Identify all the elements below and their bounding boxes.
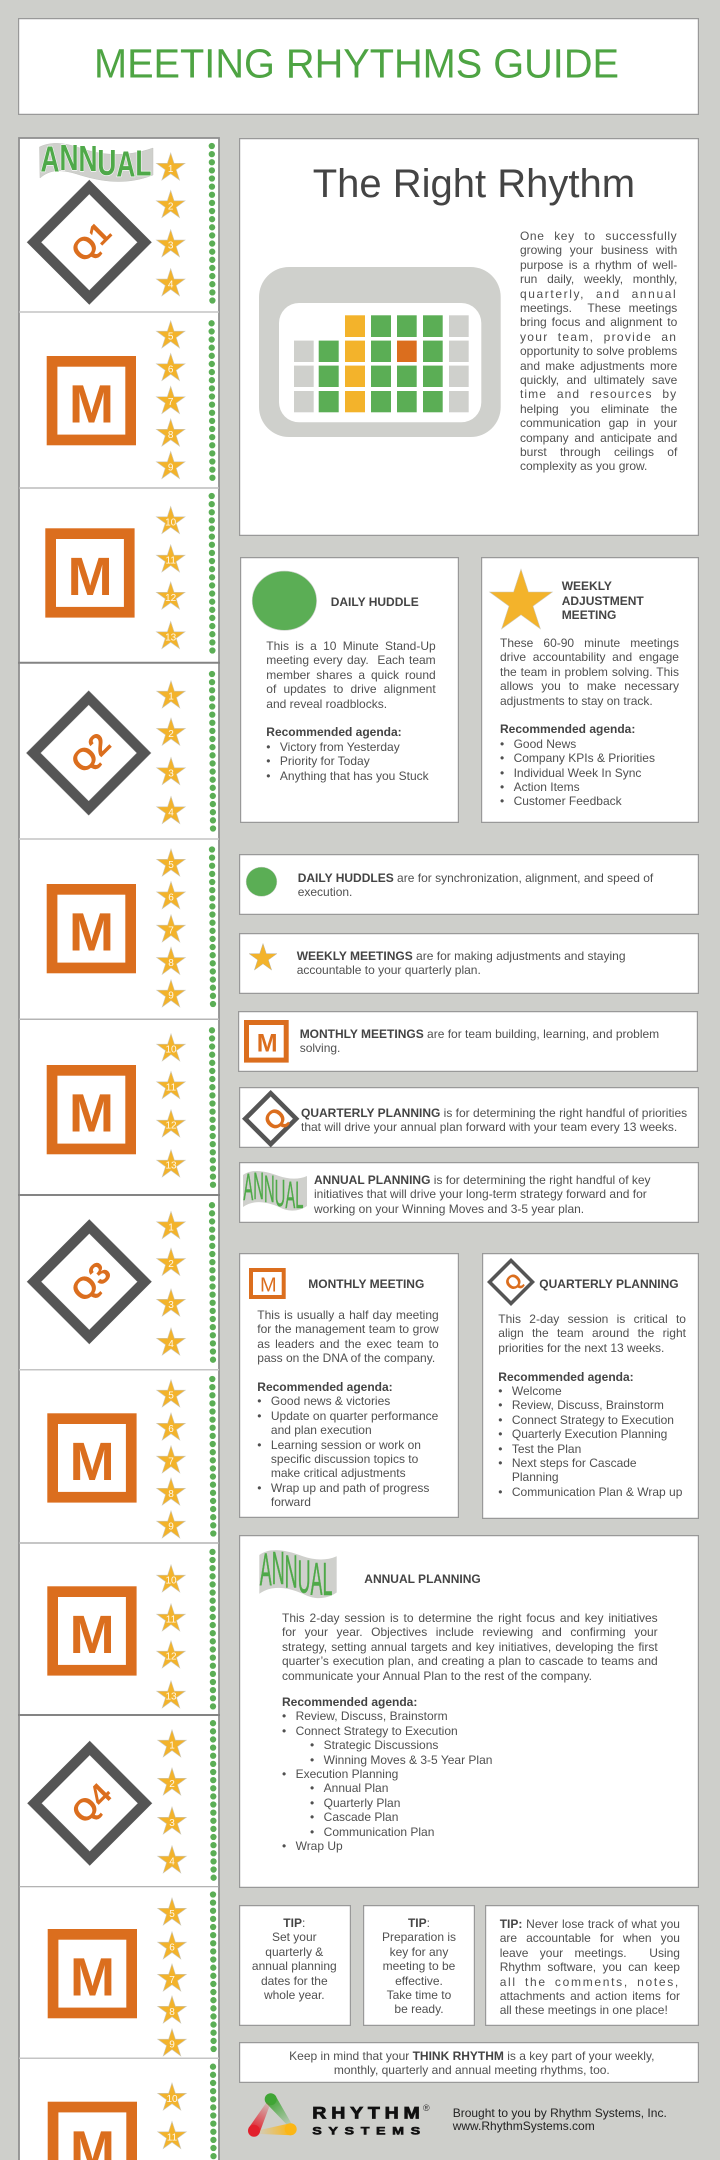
heading: The Right Rhythm xyxy=(313,162,635,206)
intro text: and make adjustments more xyxy=(520,359,677,373)
month block: weeks 10-13: 11 xyxy=(166,556,176,567)
tip text: Take time to xyxy=(387,1988,451,2002)
tip text: attachments and action items for xyxy=(500,1989,680,2003)
tip: rhythm software xyxy=(485,1905,699,2026)
footer logo: rhythm systems: ® xyxy=(423,2103,430,2113)
tip text: Rhythm software, you can keep xyxy=(500,1960,680,1974)
month block: weeks 10-13 xyxy=(51,506,185,649)
icon: monthly square xyxy=(249,1268,286,1299)
icon: calendar grid xyxy=(259,267,501,437)
tip: preparation xyxy=(363,1905,475,2026)
body text: This 2-day session is to determine the right focus and key initiatives xyxy=(282,1611,658,1625)
quarter 2 block: 1 xyxy=(168,692,174,703)
month block: weeks 5-9: 8 xyxy=(168,1489,174,1500)
legend text: WEEKLY MEETINGS are for making adjustments and staying xyxy=(297,949,626,963)
tip text: whole year. xyxy=(264,1988,325,2002)
icon: monthly square xyxy=(244,1020,289,1063)
body text and agenda: for the management team to grow xyxy=(257,1322,439,1336)
tip text xyxy=(252,1916,337,2002)
intro text: opportunity to solve problems xyxy=(520,344,677,358)
heading: MEETING xyxy=(562,608,616,622)
intro text: One key to successfully xyxy=(520,229,677,243)
body text and agenda: Recommended agenda: xyxy=(500,722,635,736)
intro text: time and resources by xyxy=(520,387,677,401)
body text and agenda: Review, Discuss, Brainstorm xyxy=(512,1398,664,1412)
panel: weekly adjustment meeting xyxy=(481,557,699,823)
month block: weeks 5-9: 6 xyxy=(169,1943,175,1954)
icon: annual banner: ANNUAL xyxy=(40,137,151,184)
tip text: all the comments, notes, xyxy=(500,1975,680,1989)
month block: weeks 5-9: 9 xyxy=(168,1522,174,1533)
body text and agenda: Company KPIs & Priorities xyxy=(514,751,655,765)
quarter 2 block: 3 xyxy=(168,768,174,779)
month block: weeks 10-13: 10 xyxy=(165,1045,177,1056)
heading xyxy=(562,579,644,622)
footer credit: www.RhythmSystems.com xyxy=(453,2119,595,2133)
tip text: dates for the xyxy=(261,1974,328,1988)
month block: weeks 5-9: M xyxy=(69,903,114,963)
month block: weeks 5-9: 8 xyxy=(169,2007,175,2018)
month block: weeks 5-9: 8 xyxy=(168,958,174,969)
tip text: Preparation is xyxy=(382,1930,456,1944)
body text and agenda: Learning session or work on xyxy=(271,1438,421,1452)
quarter 1 block xyxy=(27,153,185,305)
body text and agenda: Customer Feedback xyxy=(514,794,622,808)
month block: weeks 5-9: M xyxy=(69,375,114,435)
intro text: run daily, weekly, monthly, xyxy=(520,272,677,286)
intro text: your team, provide an xyxy=(520,330,677,344)
month block: weeks 5-9: 6 xyxy=(168,1424,174,1435)
body text and agenda: adjustments to stay on track. xyxy=(500,694,653,708)
month block: weeks 5-9: 5 xyxy=(168,1391,174,1402)
body text and agenda: and plan execution xyxy=(271,1423,372,1437)
quarter 3 block: 1 xyxy=(168,1222,174,1233)
month block: weeks 5-9: 5 xyxy=(169,1909,175,1920)
month block: weeks 5-9: M xyxy=(70,1948,115,2008)
intro text: purpose is a rhythm of well- xyxy=(520,258,677,272)
agenda list: Quarterly Plan xyxy=(324,1796,400,1810)
body text and agenda: Next steps for Cascade xyxy=(512,1456,637,1470)
quarter 3 block: 3 xyxy=(168,1300,174,1311)
footer logo: rhythm systems xyxy=(248,2093,430,2137)
intro text: growing your business with xyxy=(520,243,677,257)
icon: green circle xyxy=(246,866,278,896)
month block: weeks 5-9: 9 xyxy=(168,462,174,473)
body text: quarter’s execution plan, and creating a plan to cascade to teams and xyxy=(282,1654,658,1668)
legend text: QUARTERLY PLANNING is for determining the right handful of priorities xyxy=(301,1106,687,1120)
footer logo: rhythm systems: SYSTEMS xyxy=(312,2124,420,2137)
body text and agenda: pass on the DNA of the company. xyxy=(257,1351,435,1365)
month block: weeks 10-13: M xyxy=(68,547,113,607)
month block: weeks 10-11 xyxy=(53,2083,186,2160)
icon: gold star xyxy=(249,944,277,970)
body text and agenda: Action Items xyxy=(514,780,580,794)
footer logo: rhythm systems: RHYTHM xyxy=(312,2103,420,2122)
body text and agenda: Quarterly Execution Planning xyxy=(512,1427,667,1441)
legend: daily huddles xyxy=(239,854,699,915)
legend: annual planning xyxy=(239,1162,699,1223)
body text and agenda: drive accountability and engage xyxy=(500,650,679,664)
tip text xyxy=(500,1917,680,2017)
month block: weeks 5-9: M xyxy=(70,1432,115,1492)
quarter 3 block: 2 xyxy=(168,1259,174,1270)
body text and agenda: Recommended agenda: xyxy=(257,1380,393,1394)
tip text: are accountable for when you xyxy=(500,1931,680,1945)
heading: DAILY HUDDLE xyxy=(331,595,419,609)
heading: ANNUAL PLANNING xyxy=(364,1572,481,1586)
quarter 3 block: Q3 xyxy=(64,1255,118,1309)
icon: quarterly diamond: Q xyxy=(257,1101,293,1136)
month block: weeks 10-13: 12 xyxy=(165,1652,177,1663)
icon: annual banner: ANNUAL xyxy=(260,1543,332,1605)
agenda list xyxy=(282,1695,492,1853)
legend text xyxy=(301,1106,687,1134)
footer credit xyxy=(452,2106,667,2133)
intro text: quarterly, and annual xyxy=(520,287,677,301)
title banner: MEETING RHYTHMS GUIDE xyxy=(94,40,619,86)
body text and agenda: This is a 10 Minute Stand-Up xyxy=(266,639,436,653)
agenda list: Recommended agenda: xyxy=(282,1695,417,1709)
month block: weeks 10-13: 10 xyxy=(165,517,177,528)
quarter 1 block: 4 xyxy=(168,280,174,290)
quarter 4 block xyxy=(27,1730,186,1873)
legend text: execution. xyxy=(298,885,352,899)
body text and agenda: These 60-90 minute meetings xyxy=(500,636,679,650)
panel: annual planning xyxy=(239,1535,699,1888)
month block: weeks 5-9: 8 xyxy=(168,430,174,441)
quarter 2 block: 2 xyxy=(168,729,174,740)
body text and agenda: Good news & victories xyxy=(271,1394,390,1408)
body text and agenda: Victory from Yesterday xyxy=(280,740,400,754)
intro text: communication gap in your xyxy=(520,416,677,430)
quarter 2 block: 4 xyxy=(168,807,174,818)
tip text: Set your xyxy=(272,1930,317,1944)
body text and agenda: Planning xyxy=(512,1470,559,1484)
quarter 2 block: Q2 xyxy=(64,726,118,780)
icon: quarterly diamond xyxy=(487,1258,535,1306)
agenda list: Winning Moves & 3-5 Year Plan xyxy=(324,1752,492,1766)
month block: weeks 10-13: 11 xyxy=(166,1082,177,1093)
body text xyxy=(282,1611,658,1682)
body text and agenda: Anything that has you Stuck xyxy=(280,769,429,783)
icon: quarterly diamond xyxy=(242,1090,300,1148)
month block: weeks 5-9: 7 xyxy=(168,397,174,408)
body text and agenda: Recommended agenda: xyxy=(498,1370,634,1384)
panel: daily huddle xyxy=(240,557,459,823)
callout text xyxy=(289,2049,654,2077)
legend text: MONTHLY MEETINGS are for team building, learning, and problem xyxy=(300,1027,659,1041)
heading: QUARTERLY PLANNING xyxy=(539,1277,679,1291)
legend text: working on your Winning Moves and 3-5 year plan. xyxy=(314,1202,584,1216)
icon: monthly square: M xyxy=(260,1275,277,1297)
intro text: company and anticipate and xyxy=(520,431,677,445)
intro text: burst through ceilings of xyxy=(520,445,677,459)
icon: monthly square: M xyxy=(257,1029,278,1057)
title banner xyxy=(18,18,699,115)
tip text: leave your meetings. Using xyxy=(500,1946,680,1960)
panel: the right rhythm xyxy=(239,138,699,536)
tip text: TIP: Never lose track of what you xyxy=(500,1917,680,1931)
body text and agenda xyxy=(266,639,436,783)
tip text: be ready. xyxy=(394,2002,444,2016)
body text and agenda: Recommended agenda: xyxy=(266,725,402,739)
month block: weeks 5-9: 7 xyxy=(168,926,174,937)
legend text: accountable to your quarterly plan. xyxy=(297,963,481,977)
legend text: initiatives that will drive your long-term strategy forward and for xyxy=(314,1187,647,1201)
intro text: complexity as you grow. xyxy=(520,459,647,473)
body text and agenda: Priority for Today xyxy=(280,754,370,768)
legend text: DAILY HUDDLES are for synchronization, alignment, and speed of xyxy=(298,871,653,885)
agenda list: Annual Plan xyxy=(324,1781,388,1795)
body text and agenda: Wrap up and path of progress xyxy=(271,1481,429,1495)
heading: WEEKLY xyxy=(562,579,612,593)
intro text: helping you eliminate the xyxy=(520,402,677,416)
month block: weeks 5-9 xyxy=(53,1898,186,2056)
tip: planning dates xyxy=(239,1905,351,2026)
legend text xyxy=(314,1173,651,1216)
tip text: TIP: xyxy=(408,1916,430,1930)
intro text: bring focus and alignment to xyxy=(520,315,677,329)
tip text: annual planning xyxy=(252,1959,337,1973)
agenda list: Strategic Discussions xyxy=(324,1738,438,1752)
agenda list: Cascade Plan xyxy=(324,1810,398,1824)
quarter 4 block: Q4 xyxy=(65,1776,119,1830)
legend text: solving. xyxy=(300,1041,340,1055)
legend text: that will drive your annual plan forward with your team every 13 weeks. xyxy=(301,1120,677,1134)
month block: weeks 10-13: M xyxy=(70,1605,115,1665)
body text and agenda: This 2-day session is critical to xyxy=(498,1312,686,1326)
panel: quarterly planning xyxy=(482,1253,699,1519)
month block: weeks 10-13: 12 xyxy=(165,593,177,604)
callout: think rhythm xyxy=(239,2042,699,2083)
body text and agenda: as leaders and the exec team to xyxy=(257,1337,439,1351)
month block: weeks 5-9 xyxy=(52,849,185,1007)
month block: weeks 10-11: 10 xyxy=(166,2094,178,2105)
daily huddle dots xyxy=(212,146,214,2160)
panel: monthly meeting xyxy=(239,1253,459,1518)
body text: communicate your Annual Plan to the rest of the company. xyxy=(282,1668,592,1682)
body text and agenda: specific discussion topics to xyxy=(271,1452,418,1466)
body text and agenda xyxy=(257,1308,439,1509)
quarter 1 block: 1 xyxy=(168,164,174,175)
month block: weeks 10-13: 13 xyxy=(165,1161,177,1172)
quarter 4 block: 2 xyxy=(169,1779,175,1790)
body text and agenda: Test the Plan xyxy=(512,1442,581,1456)
body text and agenda: Welcome xyxy=(512,1384,562,1398)
left column: yearly timeline xyxy=(18,137,220,2160)
body text and agenda: the team in problem solving. This xyxy=(500,665,679,679)
icon: green circle xyxy=(252,570,317,631)
body text and agenda: meeting every day. Each team xyxy=(266,653,436,667)
quarter 4 block: 3 xyxy=(169,1818,175,1829)
tip text: quarterly & xyxy=(265,1945,323,1959)
month block: weeks 10-13: 12 xyxy=(165,1121,177,1132)
agenda list: Communication Plan xyxy=(324,1825,434,1839)
quarter 4 block: 4 xyxy=(169,1857,175,1868)
icon: quarterly diamond: Q xyxy=(501,1269,527,1296)
body text and agenda: make critical adjustments xyxy=(271,1466,406,1480)
month block: weeks 10-11: 11 xyxy=(167,2132,178,2143)
body text and agenda xyxy=(500,636,679,808)
quarter 3 block xyxy=(27,1212,185,1355)
agenda list: Review, Discuss, Brainstorm xyxy=(296,1709,448,1723)
icon: annual banner: ANNUAL xyxy=(243,1166,303,1217)
body text and agenda: align the team around the right xyxy=(498,1326,686,1340)
quarter 4 block: 1 xyxy=(169,1741,175,1752)
legend: monthly meetings xyxy=(238,1011,698,1072)
body text and agenda: Individual Week In Sync xyxy=(514,766,641,780)
heading: ADJUSTMENT xyxy=(562,594,644,608)
month block: weeks 5-9: 6 xyxy=(168,364,174,375)
month block: weeks 5-9: 5 xyxy=(168,332,174,343)
month block: weeks 5-9: 9 xyxy=(169,2040,175,2051)
month block: weeks 5-9 xyxy=(52,321,185,479)
month block: weeks 5-9: 7 xyxy=(169,1975,175,1986)
body text and agenda: Connect Strategy to Execution xyxy=(512,1413,674,1427)
icon: gold star xyxy=(489,568,553,630)
body text and agenda: and reveal roadblocks. xyxy=(266,697,387,711)
month block: weeks 5-9 xyxy=(53,1380,185,1538)
legend text: ANNUAL PLANNING is for determining the right handful of key xyxy=(314,1173,651,1187)
legend text xyxy=(300,1027,659,1055)
month block: weeks 10-13: 10 xyxy=(165,1576,177,1587)
footer credit: Brought to you by Rhythm Systems, Inc. xyxy=(453,2106,667,2120)
quarter 2 block xyxy=(26,681,185,824)
month block: weeks 5-9: 6 xyxy=(168,892,174,903)
legend text xyxy=(296,949,626,977)
body text and agenda: Update on quarter performance xyxy=(271,1409,438,1423)
quarter 3 block: 4 xyxy=(168,1339,174,1350)
legend: quarterly planning xyxy=(239,1087,699,1148)
tip text: effective. xyxy=(395,1974,443,1988)
agenda list: Wrap Up xyxy=(296,1839,343,1853)
heading: MONTHLY MEETING xyxy=(308,1277,424,1291)
body text and agenda xyxy=(498,1312,686,1499)
tip text xyxy=(382,1916,456,2016)
intro text: meetings. These meetings xyxy=(520,301,677,315)
body text and agenda: This is usually a half day meeting xyxy=(257,1308,439,1322)
legend: weekly meetings xyxy=(239,933,699,994)
month block: weeks 10-13: 13 xyxy=(165,1692,177,1703)
body text and agenda: allows you to make necessary xyxy=(500,679,679,693)
body text and agenda: forward xyxy=(271,1495,311,1509)
body text: strategy, setting annual targets and key initiatives, developing the first xyxy=(282,1640,658,1654)
quarter 1 block: 3 xyxy=(168,240,174,252)
tip text: key for any xyxy=(390,1945,448,1959)
body text: for your year. Objectives include reviewing and confirming your xyxy=(282,1625,658,1639)
legend text xyxy=(298,871,654,899)
tip text: meeting to be xyxy=(383,1959,455,1973)
month block: weeks 10-13: 13 xyxy=(165,632,177,643)
body text and agenda: member shares a quick round xyxy=(266,668,436,682)
tip text: TIP: xyxy=(283,1916,305,1930)
month block: weeks 5-9: 9 xyxy=(168,991,174,1002)
callout text: monthly, quarterly and annual meeting rhythms, too. xyxy=(334,2063,610,2077)
intro text: quickly, and ultimately save xyxy=(520,373,677,387)
quarter 1 block: 2 xyxy=(168,201,174,212)
month block: weeks 10-13 xyxy=(52,1034,185,1177)
month block: weeks 10-13: 11 xyxy=(166,1615,177,1626)
body text and agenda: priorities for the next 13 weeks. xyxy=(498,1341,664,1355)
callout text: Keep in mind that your THINK RHYTHM is a key part of your weekly, xyxy=(289,2049,654,2063)
agenda list: Connect Strategy to Execution xyxy=(296,1724,458,1738)
month block: weeks 10-13 xyxy=(53,1565,185,1708)
body text and agenda: Communication Plan & Wrap up xyxy=(512,1485,682,1499)
body text and agenda: Good News xyxy=(514,737,576,751)
tip text: all these meetings in one place! xyxy=(500,2003,668,2017)
intro text xyxy=(520,229,678,473)
month block: weeks 5-9: 5 xyxy=(168,860,174,871)
quarter 1 block: Q1 xyxy=(64,215,118,269)
agenda list: Execution Planning xyxy=(296,1767,398,1781)
month block: weeks 10-13: M xyxy=(69,1084,114,1144)
body text and agenda: of updates to drive alignment xyxy=(266,682,436,696)
month block: weeks 5-9: 7 xyxy=(168,1457,174,1468)
